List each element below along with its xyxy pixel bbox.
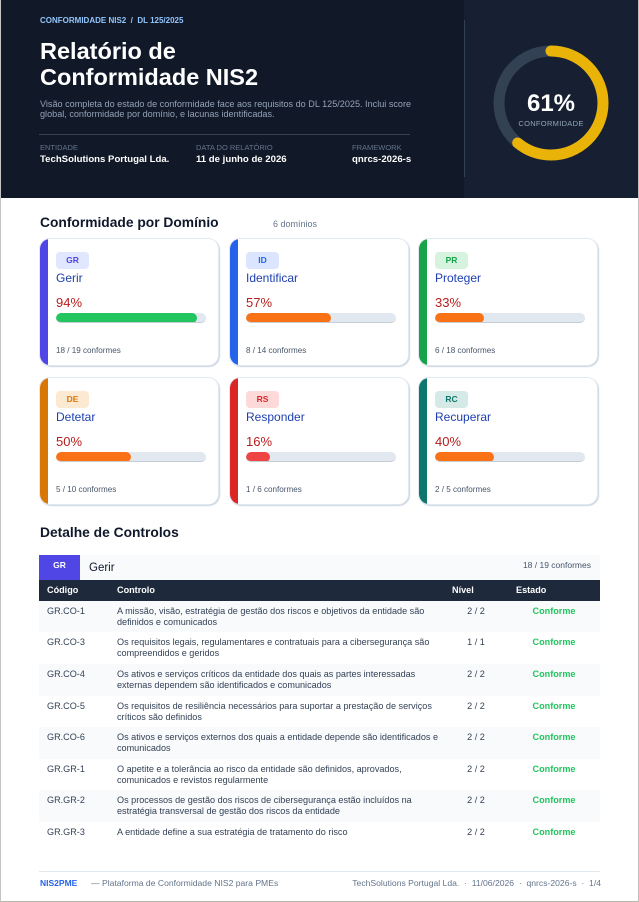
row GR.CO-6: Os ativos e serviços externos dos quais a entidade depende são identificados e [117,732,438,742]
card: Responder: RS [257,394,268,404]
eyebrow: CONFORMIDADE NIS2 / DL 125/2025 [40,16,183,25]
meta: data do relatório: DATA DO RELATÓRIO [196,142,273,152]
row GR.CO-6: comunicados [117,743,171,753]
card: Gerir: 18 / 19 conformes [56,346,121,354]
row GR.GR-1 [47,764,576,785]
domain count: 18 / 19 conformes [523,560,591,570]
card: Responder: 16% [246,434,272,449]
card: Recuperar [419,378,597,504]
row GR.CO-1: GR.CO-1 [47,606,85,616]
card: Proteger [419,239,597,365]
card: Recuperar: 40% [435,434,461,449]
row GR.CO-1: A missão, visão, estratégia de gestão dos riscos e objetivos da entidade são [117,606,424,616]
card: Proteger: PR [446,255,457,265]
title: Conformidade NIS2 [40,64,258,90]
row GR.CO-5: críticos são definidos [117,712,202,722]
row GR.CO-1 [39,601,600,632]
row GR.GR-1: comunicados e revistos regularmente [117,775,268,785]
domain count: 6 domínios [273,219,317,229]
row GR.GR-3: 2 / 2 [467,827,485,837]
table header: Nível [452,585,474,595]
card: Responder: 1 / 6 conformes [246,484,302,494]
meta: framework [352,142,411,164]
row GR.CO-4 [39,664,600,696]
row GR.GR-1: GR.GR-1 [47,764,85,774]
row GR.CO-4: externas dependem são identificados e comunicados [117,680,331,690]
row GR.CO-1: Conforme [533,606,575,616]
subtitle: Visão completa do estado de conformidade face aos requisitos do DL 125/2025. Inclui score global, conformidade por domínio, e lacunas identificadas. [40,98,411,119]
row GR.GR-2: estratégia transversal de gestão dos riscos da entidade [117,806,340,816]
row GR.CO-4: GR.CO-4 [47,669,85,679]
row GR.CO-4: Os ativos e serviços críticos da entidade dos quais as partes interessadas [117,669,415,679]
card: Detetar [40,378,218,504]
title: Relatório de [40,38,176,64]
card: Recuperar: RC [445,394,458,404]
row GR.GR-3 [47,827,576,837]
card: Proteger: Proteger [435,270,481,284]
domain tag [39,555,80,580]
heading: conformidade por domínio: Conformidade por Domínio [40,215,219,230]
meta: entidade: TechSolutions Portugal Lda. [40,154,169,164]
table header [39,580,600,601]
row GR.GR-2: Conforme [533,795,575,805]
heading: detalhe de controlos: Detalhe de Controlos [40,525,179,540]
card: Identificar: Identificar [246,270,298,284]
row GR.CO-4: 2 / 2 [467,669,485,679]
row GR.CO-5: Os requisitos de resiliência necessários para suportar a prestação de serviços [117,701,432,711]
table header: Estado [516,585,546,595]
card: Proteger: 33% [435,295,461,310]
card: Responder [230,378,408,504]
row GR.CO-5: GR.CO-5 [47,701,85,711]
row GR.GR-2: GR.GR-2 [47,795,85,805]
card: Detetar: 50% [56,434,82,449]
card: Gerir: 94% [56,295,82,310]
card: Recuperar: Recuperar [435,410,491,424]
footer tagline: — Plataforma de Conformidade NIS2 para PMEs [91,878,278,888]
row GR.CO-3: 1 / 1 [467,637,485,647]
header panel [0,0,639,198]
row GR.CO-6: GR.CO-6 [47,732,85,742]
meta: data do relatório: 11 de junho de 2026 [196,154,287,164]
row GR.GR-1: Conforme [533,764,575,774]
row GR.CO-6: 2 / 2 [467,732,485,742]
card: Responder: Responder [246,410,305,424]
footer [39,871,600,893]
meta: framework: qnrcs-2026-s [352,154,411,164]
meta: entidade [40,142,169,164]
domain name: Gerir [89,562,115,574]
card: Detetar: DE [67,394,78,404]
card: Identificar [230,239,408,365]
table: controlos [39,580,600,837]
meta: framework: FRAMEWORK [352,142,402,152]
row GR.GR-1: 2 / 2 [467,764,485,774]
row GR.CO-4: Conforme [533,669,575,679]
table header: Controlo [117,585,155,595]
row GR.GR-3: Conforme [533,827,575,837]
domain bar: Gerir [39,555,600,580]
meta: data do relatório [196,142,287,164]
row GR.CO-3: GR.CO-3 [47,637,85,647]
card: Gerir: GR [66,255,79,265]
score label: CONFORMIDADE [518,119,584,128]
row GR.GR-2: 2 / 2 [467,795,485,805]
row GR.CO-1: 2 / 2 [467,606,485,616]
donut chart: 61% [494,46,608,160]
row GR.CO-5 [47,701,576,722]
card: Detetar: Detetar [56,410,95,424]
meta: entidade: ENTIDADE [40,142,78,152]
table header: Código [47,585,78,595]
card: Identificar: 8 / 14 conformes [246,346,306,354]
row GR.CO-5: Conforme [533,701,575,711]
row GR.CO-3 [47,637,576,658]
footer brand: NIS2PME [40,878,77,888]
card: Gerir: Gerir [56,270,83,284]
card: Recuperar: 2 / 5 conformes [435,484,491,494]
card: Detetar: 5 / 10 conformes [56,484,116,494]
row GR.CO-1: definidos e comunicados [117,617,217,627]
row GR.GR-3: GR.GR-3 [47,827,85,837]
row GR.CO-3: compreendidos e geridos [117,648,219,658]
row GR.CO-5: 2 / 2 [467,701,485,711]
title [40,38,258,90]
row GR.GR-2 [39,790,600,822]
card: Gerir [40,239,218,365]
row GR.CO-6 [39,727,600,759]
row GR.CO-6: Conforme [533,732,575,742]
score panel [464,0,639,198]
row GR.GR-1: O apetite e a tolerância ao risco da entidade são definidos, aprovados, [117,764,402,774]
row GR.CO-3: Os requisitos legais, regulamentares e contratuais para a cibersegurança são [117,637,429,647]
domain tag: GR [53,560,66,570]
card: Proteger: 6 / 18 conformes [435,346,495,354]
footer meta: TechSolutions Portugal Lda. · 11/06/2026 · qnrcs-2026-s · 1/4 [352,878,601,888]
row GR.GR-3: A entidade define a sua estratégia de tratamento do risco [117,827,348,837]
card: Identificar: 57% [246,295,272,310]
score value: 61% [527,90,575,116]
card: Identificar: ID [258,255,267,265]
row GR.GR-2: Os processos de gestão dos riscos de cibersegurança estão incluídos na [117,795,412,805]
row GR.CO-3: Conforme [533,637,575,647]
